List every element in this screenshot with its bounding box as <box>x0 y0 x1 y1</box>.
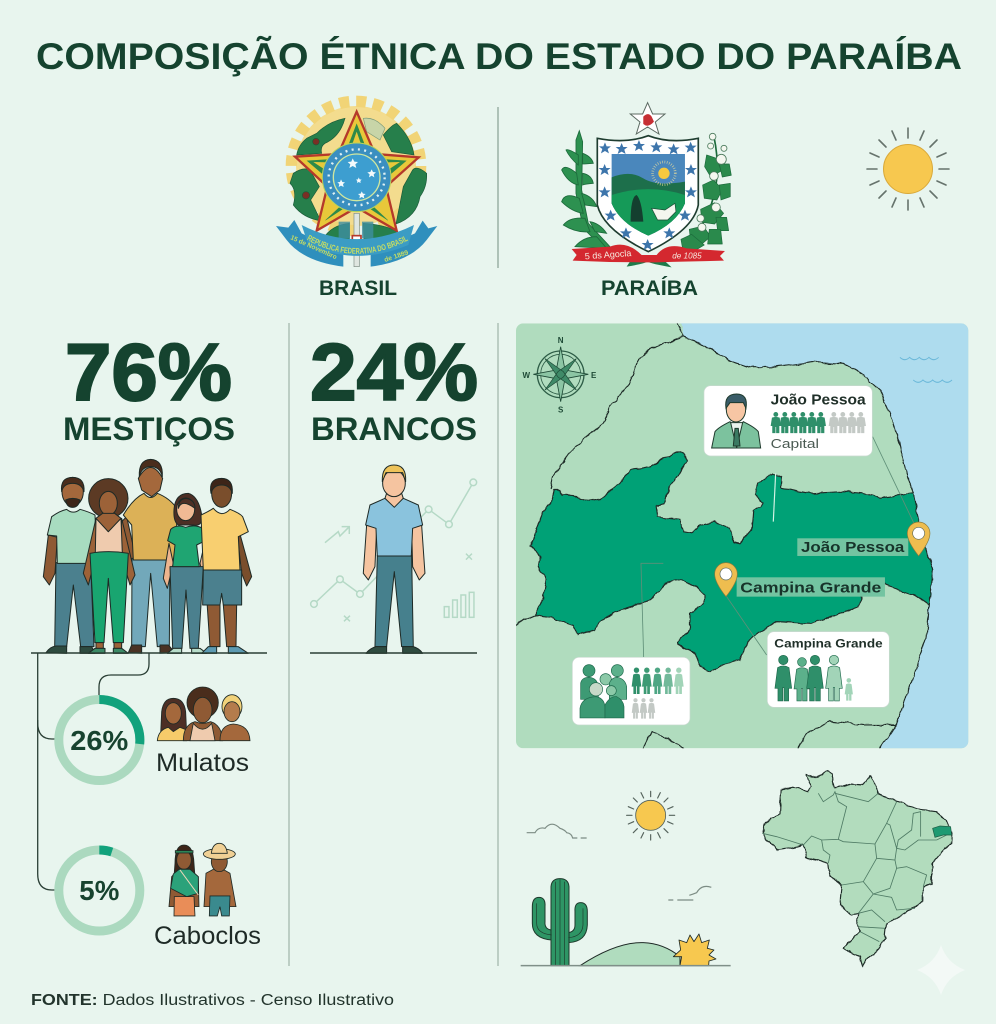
ground line <box>521 963 731 968</box>
pictogram: 6 of 10 people <box>771 412 866 433</box>
pictogram: people rows <box>632 667 684 719</box>
divider between emblems <box>497 107 499 268</box>
clouds <box>527 824 711 900</box>
sword and hilt <box>339 213 373 267</box>
leader lines <box>641 437 914 657</box>
label: Mulatos: Mulatos <box>156 749 249 777</box>
wreath <box>290 118 427 240</box>
five-pointed star <box>295 112 419 231</box>
man with hat <box>203 843 236 916</box>
donut: 26% <box>59 699 140 780</box>
red ribbon <box>572 245 725 267</box>
ground line: white man <box>310 652 477 654</box>
blue ribbon <box>276 220 438 267</box>
label: Brasil: BRASIL <box>319 276 397 300</box>
source note: FONTE: Dados Ilustrativos - Censo Ilustrativo <box>31 992 394 1009</box>
label: Paraíba: PARAÍBA <box>601 275 698 300</box>
map label: João Pessoa: João Pessoa <box>801 539 905 556</box>
card: João Pessoa <box>704 386 872 456</box>
person: bearded man <box>43 477 97 653</box>
map panel: Paraíba <box>513 313 983 753</box>
label: Mestiços: MESTIÇOS <box>63 411 235 447</box>
man with blond hair <box>220 695 250 741</box>
compass rose: W <box>523 371 531 380</box>
icon: sun top right <box>867 128 949 210</box>
sea waves <box>900 357 952 382</box>
label: Brancos: BRANCOS <box>311 411 477 447</box>
value: 5% <box>79 875 119 906</box>
landscape: cactus and sun <box>521 791 731 966</box>
woman <box>157 698 187 741</box>
stat: 24%: 24% <box>310 328 478 418</box>
state borders <box>762 792 947 942</box>
blue ribbon: 15 de Novembro <box>289 234 338 261</box>
hill <box>580 943 680 966</box>
card: João Pessoa: Capital <box>771 436 819 451</box>
pictogram: family group <box>580 665 627 718</box>
person: tall man <box>120 459 180 653</box>
sugar cane <box>562 131 610 248</box>
background chart marks <box>311 479 477 621</box>
person: woman with afro <box>83 479 135 653</box>
column dividers <box>289 323 498 966</box>
red ribbon: 5 ds Agocla <box>584 248 632 261</box>
Paraíba highlight <box>933 826 952 837</box>
compass rose: S <box>558 406 564 415</box>
card: João Pessoa: João Pessoa <box>771 393 867 409</box>
decorative sparkle <box>917 945 965 995</box>
pin: João Pessoa <box>907 522 930 556</box>
title: COMPOSIÇÃO ÉTNICA DO ESTADO DO PARAÍBA <box>36 35 962 77</box>
pin: Campina Grande <box>715 563 737 597</box>
ground line: group <box>31 652 267 654</box>
land and sea <box>513 313 983 753</box>
compass rose: N <box>558 336 564 345</box>
label: Caboclos: Caboclos <box>154 922 261 950</box>
spiky sun on horizon <box>673 934 716 966</box>
Paraíba state shape <box>530 452 933 672</box>
indigenous woman <box>169 845 199 916</box>
map label: Campina Grande: Campina Grande <box>740 579 881 596</box>
man with curly hair <box>183 687 223 741</box>
connector lines to sub-groups <box>38 653 149 890</box>
person: young woman <box>163 493 210 653</box>
card: Campina Grande: Campina Grande <box>774 636 883 650</box>
card: Campina Grande <box>767 632 889 707</box>
person <box>363 465 425 653</box>
blue ribbon: REPUBLICA FEDERATIVA DO BRASIL <box>307 234 408 254</box>
shield <box>597 136 698 252</box>
icon: mulatos people <box>157 687 250 741</box>
emblem: Brasil <box>276 96 438 267</box>
red ribbon: de 1085 <box>672 252 702 261</box>
cactus <box>532 879 587 966</box>
icon: man in suit <box>712 394 761 448</box>
illustration: group of mixed-race people <box>43 459 252 653</box>
emblem: Paraíba <box>562 103 731 267</box>
star crest <box>630 103 665 134</box>
inner white line <box>773 473 776 522</box>
donut: 5% <box>59 850 140 931</box>
compass rose: E <box>591 371 597 380</box>
card: interior region <box>572 657 690 725</box>
golden rays <box>291 101 421 231</box>
cotton branch <box>681 133 731 250</box>
value: 26% <box>70 725 128 756</box>
blue disc with stars <box>322 143 391 212</box>
stat: 76%: 76% <box>65 328 232 418</box>
person: man in shorts <box>201 478 252 653</box>
pictogram: family <box>775 655 853 701</box>
map: Brasil with Paraíba highlighted <box>762 771 952 967</box>
illustration: white man with chart background <box>311 465 477 653</box>
compass rose <box>523 336 597 415</box>
icon: caboclos people <box>169 843 236 916</box>
icon: sun <box>627 791 675 840</box>
blue ribbon: de 1889 <box>383 249 410 264</box>
